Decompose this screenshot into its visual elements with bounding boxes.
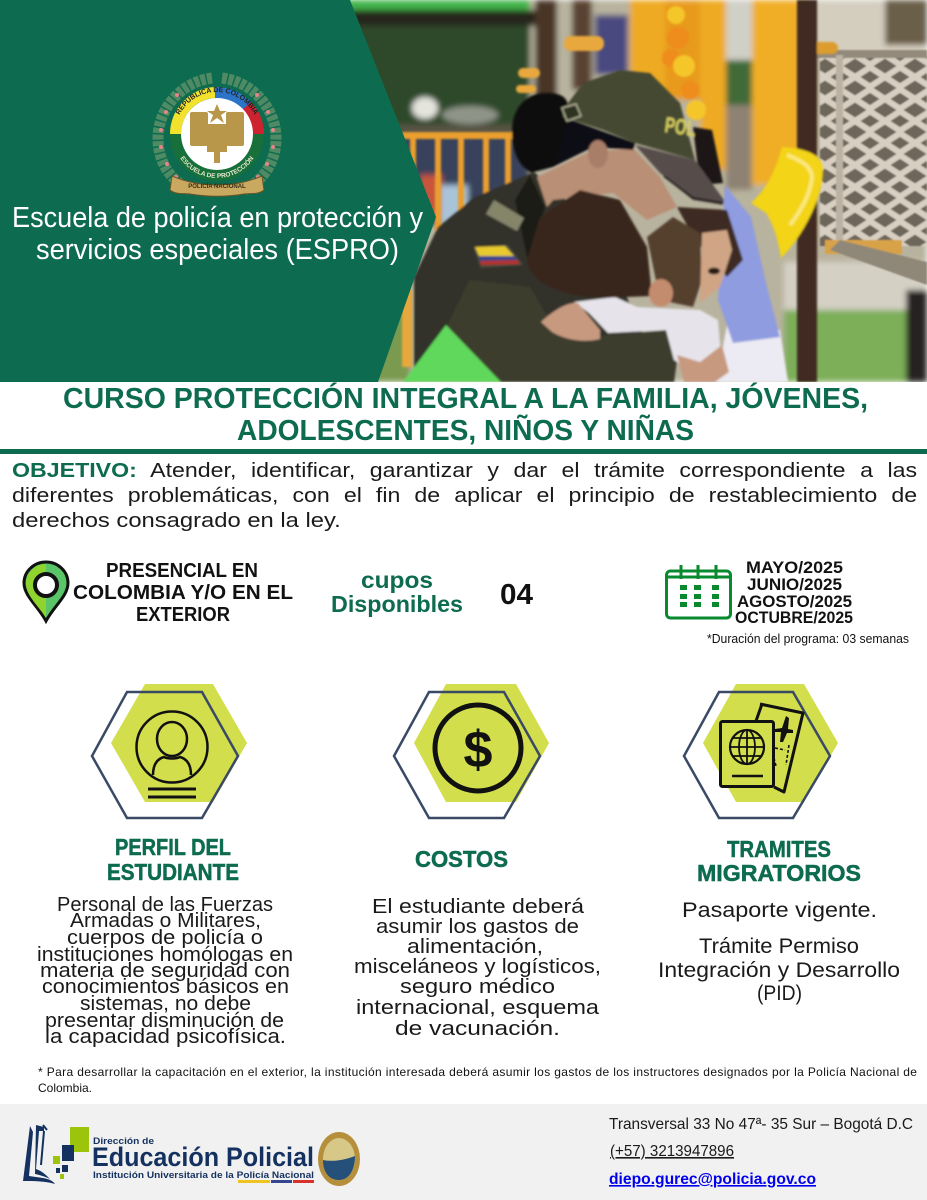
footer band [0, 1104, 927, 1200]
dates: MAYO/2025 [746, 558, 843, 577]
text: tramites migratorios: Pasaporte vigente. [682, 899, 877, 922]
boy hair [527, 190, 652, 298]
text: perfil del estudiante: materia de seguridad con [40, 960, 290, 982]
dates [735, 558, 853, 627]
heading: tramites migratorios: MIGRATORIOS [697, 860, 861, 886]
heading: perfil del estudiante: PERFIL DEL [115, 834, 231, 860]
cupos label [331, 567, 463, 617]
ear [588, 140, 608, 168]
icon: location pin [24, 562, 68, 621]
text: perfil del estudiante: la capacidad psicofísica. [45, 1026, 286, 1048]
contact details [609, 1116, 913, 1188]
hand [541, 303, 600, 341]
logo: ESPRO crest: REPÚBLICA DE COLOMBIA [176, 87, 258, 115]
objective text block [12, 459, 917, 532]
header school name [12, 202, 423, 266]
play pole [797, 0, 817, 382]
text: perfil del estudiante [37, 894, 293, 1048]
text: tramites migratorios: Integración y Desarrollo [658, 959, 900, 982]
cupos label: cupos [361, 567, 433, 593]
heading: perfil del estudiante: ESTUDIANTE [107, 859, 239, 885]
white strip under photo [0, 382, 927, 450]
second child hair [647, 217, 702, 307]
header school name: servicios especiales (ESPRO) [36, 234, 399, 266]
cap crown [563, 70, 695, 160]
slide [751, 147, 823, 258]
balls [667, 6, 685, 24]
dates: JUNIO/2025 [747, 575, 842, 594]
cap visor [635, 145, 724, 205]
lavender towel [718, 185, 780, 343]
shoulder patch [486, 200, 524, 231]
text: tramites migratorios: Trámite Permiso [699, 935, 859, 958]
text: costos [354, 895, 601, 1040]
modality text [73, 560, 293, 626]
logo: Dirección de Educación Policial: Educación Policial [92, 1142, 314, 1172]
logo: Dirección de Educación Policial: Institución Universitaria de la Policía Nacional [93, 1170, 314, 1181]
heading: tramites migratorios [697, 836, 861, 886]
logo: ESPRO crest [152, 72, 282, 197]
heading: perfil del estudiante [107, 834, 239, 885]
icon: calendar [666, 565, 730, 618]
text: costos: de vacunación. [395, 1017, 560, 1040]
text: tramites migratorios [658, 899, 900, 1005]
title [63, 381, 868, 447]
text: tramites migratorios: (PID) [757, 982, 802, 1005]
contact details: diepo.gurec@policia.gov.co [609, 1171, 816, 1188]
objective text block: diferentes problemáticas, con el fin de aplicar el principio de restablecimiento de [12, 484, 917, 507]
text: perfil del estudiante: conocimientos básicos en [42, 976, 289, 998]
objective text block: OBJETIVO: Atender, identificar, garantizar y dar el trámite correspondiente a las [12, 459, 917, 482]
dates: AGOSTO/2025 [737, 592, 852, 611]
text: perfil del estudiante: Armadas o Militares, [70, 910, 261, 932]
icon: passport and ticket [684, 684, 838, 818]
dark hair behind cap [693, 127, 723, 185]
girl face [700, 230, 732, 303]
heading: tramites migratorios: TRAMITES [727, 836, 831, 862]
text: perfil del estudiante: instituciones homólogas en [37, 944, 293, 966]
logo: ESPRO crest: POLICÍA NACIONAL [188, 182, 246, 190]
objective text block: derechos consagrado en la ley. [12, 509, 341, 532]
text: costos: internacional, esquema [356, 996, 600, 1019]
text: perfil del estudiante: cuerpos de policía o [67, 927, 263, 949]
logo: Dirección de Educación Policial [23, 1125, 360, 1186]
black hair under cap [530, 117, 635, 173]
uniform body [414, 172, 677, 382]
modality text: PRESENCIAL EN [106, 560, 258, 582]
photo: officer hugging children at a playground: POL [663, 112, 697, 141]
footnote: Colombia. [38, 1081, 92, 1095]
neck and face skin [537, 148, 677, 220]
icon: dollar coin: $ [464, 721, 493, 779]
header school name: Escuela de policía en protección y [12, 202, 423, 234]
footnote: * Para desarrollar la capacitación en el exterior, la institución interesada deberá asumir los gastos de los instructores designados por la Policía Nacional de [38, 1065, 917, 1079]
flag patch [473, 245, 523, 268]
text: perfil del estudiante: sistemas, no debe [80, 993, 251, 1015]
cupos label: Disponibles [331, 591, 463, 617]
modality text: EXTERIOR [136, 604, 230, 626]
text: costos: misceláneos y logísticos, [354, 955, 601, 978]
heading: costos: COSTOS [415, 846, 508, 872]
text: costos: seguro médico [400, 975, 555, 998]
footnote [38, 1065, 917, 1095]
text: perfil del estudiante: Personal de las Fuerzas [57, 894, 273, 916]
title: CURSO PROTECCIÓN INTEGRAL A LA FAMILIA, JÓVENES, [63, 381, 868, 415]
photo: officer hugging children at a playground [340, 0, 927, 382]
white sleeve [574, 297, 722, 382]
duration note: *Duración del programa: 03 semanas [707, 632, 909, 646]
icon: student profile [92, 684, 247, 818]
contact details: (+57) 3213947896 [610, 1143, 734, 1160]
white skirt [716, 320, 788, 382]
text: costos: El estudiante deberá [372, 895, 585, 918]
cupos number: 04 [500, 579, 533, 611]
green shirt [403, 325, 501, 382]
text: costos: asumir los gastos de [376, 915, 579, 938]
fence bars [402, 132, 522, 139]
logo: ESPRO crest: ESCUELA DE PROTECCIÓN [180, 156, 254, 178]
modality text: COLOMBIA Y/O EN EL [73, 582, 293, 604]
hair bun [512, 93, 568, 172]
green header panel [0, 0, 436, 382]
dates: OCTUBRE/2025 [735, 608, 853, 627]
curly girl hair [677, 207, 743, 277]
text: costos: alimentación, [407, 935, 543, 958]
icon: dollar coin [394, 684, 549, 818]
logo: Dirección de Educación Policial: Dirección de [93, 1136, 154, 1147]
contact details: Transversal 33 No 47ª- 35 Sur – Bogotá D.C [609, 1116, 913, 1133]
text: perfil del estudiante: presentar disminución de [45, 1010, 284, 1032]
title: ADOLESCENTES, NIÑOS Y NIÑAS [237, 413, 694, 447]
